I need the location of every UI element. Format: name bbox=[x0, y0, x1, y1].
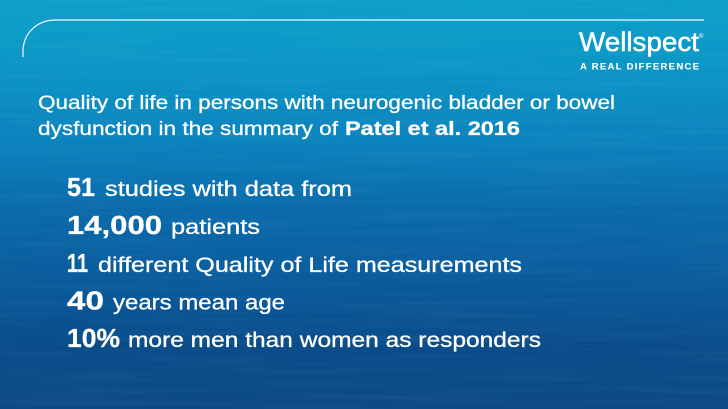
fact: 14,000 patients bbox=[67, 210, 260, 240]
fact: 40 years: 40 bbox=[67, 286, 104, 316]
fact: 14,000 patients: 14,000 bbox=[67, 210, 162, 240]
fact: 14,000 patients: patients bbox=[171, 216, 260, 239]
fact: 51 studies bbox=[67, 172, 352, 202]
fact: 11 measurements: different Quality of Life measurements bbox=[98, 254, 522, 277]
logo: Wellspect: ® bbox=[699, 33, 704, 40]
logo: Wellspect: A REAL DIFFERENCE bbox=[580, 62, 699, 72]
fact: 51 studies: studies with data from bbox=[105, 178, 352, 201]
fact: 11 measurements bbox=[67, 248, 522, 278]
heading: dysfunction in the summary of bbox=[38, 119, 339, 140]
heading bbox=[38, 93, 615, 140]
fact: 51 studies: 51 bbox=[67, 172, 95, 202]
fact: 40 years bbox=[67, 286, 285, 316]
decorative rounded frame line bbox=[23, 20, 704, 57]
fact: 10% more men: 10% bbox=[67, 323, 120, 353]
heading: Quality of life in persons with neurogenic bladder or bowel bbox=[38, 93, 615, 114]
fact: 11 measurements: 11 bbox=[67, 248, 88, 278]
fact: 40 years: years mean age bbox=[113, 292, 285, 314]
logo: Wellspect bbox=[579, 27, 704, 72]
fact: 10% more men bbox=[67, 323, 541, 353]
heading: Patel et al. 2016 bbox=[345, 119, 520, 140]
fact: 10% more men: more men than women as responders bbox=[128, 329, 541, 352]
logo: Wellspect: Wellspect bbox=[579, 27, 700, 57]
